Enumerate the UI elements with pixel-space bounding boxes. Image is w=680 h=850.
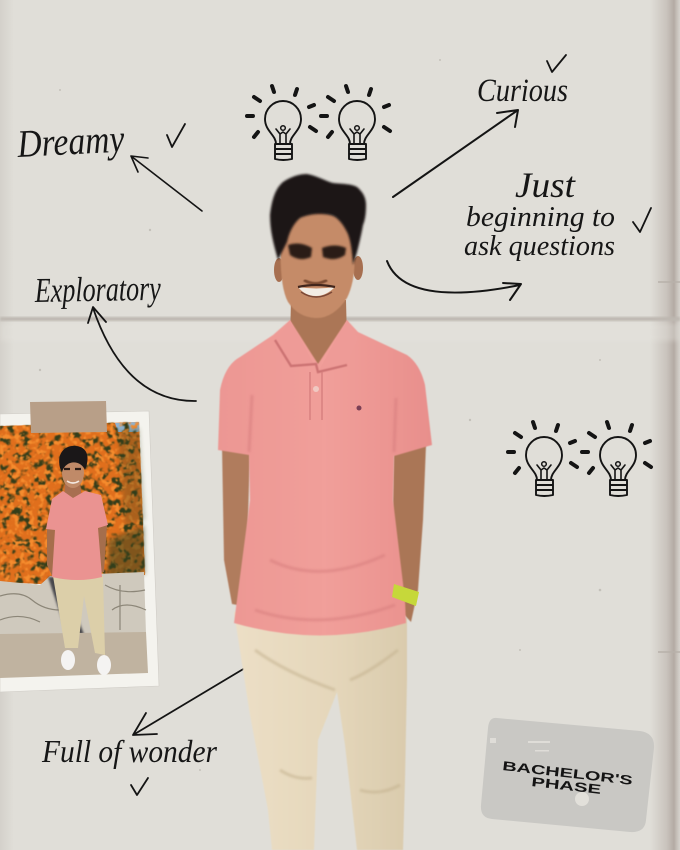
label: Full of wonder: Full of wonder bbox=[41, 733, 218, 769]
arrow: to Just beginning bbox=[387, 261, 521, 300]
label: Just beginning to ask questions: ask questions bbox=[464, 231, 615, 262]
bulbs: lower pair bbox=[508, 422, 651, 496]
bulbs: top pair bbox=[247, 86, 390, 160]
polo shirt bbox=[218, 320, 432, 636]
small figure: hair bbox=[59, 446, 88, 472]
label: Just beginning to ask questions: beginning to bbox=[466, 202, 615, 233]
hair bbox=[270, 174, 366, 265]
check: Curious bbox=[547, 55, 566, 72]
photo frame bbox=[0, 411, 159, 692]
shirt emblem bbox=[356, 406, 362, 410]
label: Exploratory: Exploratory bbox=[34, 269, 161, 310]
check: Full of wonder bbox=[131, 778, 148, 795]
label: Curious: Curious bbox=[477, 73, 568, 109]
face bbox=[281, 212, 355, 318]
head bbox=[270, 174, 366, 318]
small figure: shirt bbox=[46, 491, 108, 580]
stone wall bbox=[0, 572, 146, 634]
collar bbox=[277, 320, 318, 372]
right arm bbox=[392, 445, 426, 622]
arrow: to Curious bbox=[393, 110, 518, 197]
stamp: Bachelor's Phase bbox=[481, 718, 654, 832]
label: Dreamy: Dreamy bbox=[15, 117, 126, 166]
small figure: shoes bbox=[61, 650, 75, 670]
arrow: to Exploratory bbox=[88, 307, 196, 401]
polaroid photo bbox=[0, 401, 159, 692]
neck bbox=[290, 300, 347, 372]
stamp: Bachelor's Phase: PHASE bbox=[531, 774, 602, 797]
eyebrows and eyes bbox=[288, 244, 346, 259]
photo image bbox=[0, 422, 148, 678]
ears bbox=[274, 258, 284, 282]
label: Just beginning to ask questions bbox=[464, 165, 615, 262]
main figure bbox=[218, 174, 432, 850]
nose bbox=[304, 280, 327, 284]
trouser folds bbox=[255, 650, 400, 792]
arrow: to Full of wonder bbox=[133, 668, 245, 735]
tape bbox=[30, 401, 107, 433]
mouth bbox=[298, 287, 335, 296]
small figure: neck and face bbox=[64, 482, 82, 500]
small figure: arms bbox=[47, 525, 107, 578]
small figure: trousers bbox=[53, 576, 105, 655]
wristband bbox=[392, 584, 419, 606]
left arm bbox=[222, 445, 250, 606]
placket and button bbox=[310, 372, 322, 420]
small figure bbox=[46, 446, 111, 675]
arrow: to Dreamy bbox=[131, 156, 202, 211]
stamp: Bachelor's Phase: BACHELOR'S bbox=[502, 758, 634, 788]
trousers bbox=[234, 612, 407, 850]
ground bbox=[0, 632, 148, 678]
check: Just beginning bbox=[633, 208, 651, 232]
orange flowering bush bbox=[0, 422, 145, 584]
shirt folds bbox=[249, 395, 396, 620]
label: Just beginning to ask questions: Just bbox=[515, 165, 576, 205]
check: Dreamy bbox=[167, 124, 185, 147]
